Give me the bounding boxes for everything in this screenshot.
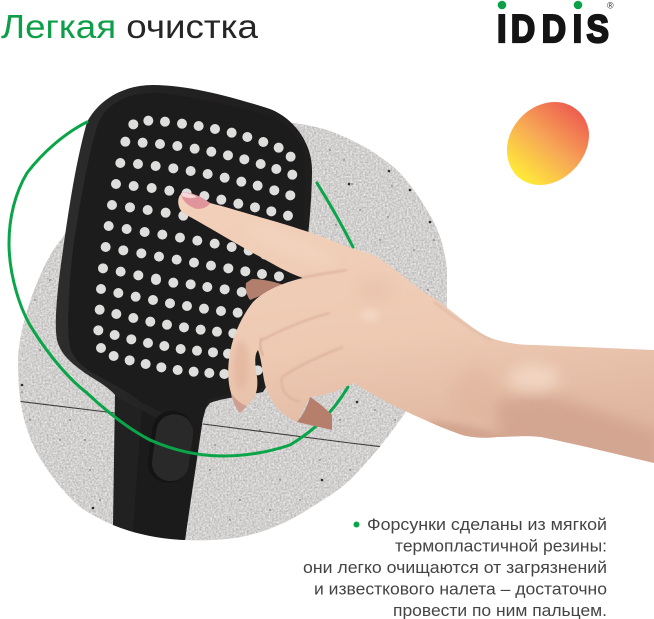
- green bullet: [354, 522, 360, 528]
- head rim: [56, 85, 312, 420]
- description text: они легко очищаются от загрязнений: [303, 559, 607, 577]
- logo: IDDIS: IDDIS: [497, 7, 609, 51]
- description text: [303, 516, 607, 619]
- description text: термопластичной резины:: [395, 538, 607, 556]
- hand and forearm silhouette: [178, 193, 654, 463]
- middle fingernail: [231, 393, 247, 413]
- shower head and handle: [56, 85, 312, 540]
- stone texture blob: [18, 123, 447, 540]
- thumb behind the fingers: [246, 279, 288, 300]
- mode button: [145, 408, 196, 485]
- spray nozzles: [98, 121, 292, 374]
- description text: и известкового налета – достаточно: [314, 580, 607, 598]
- gradient blob decoration: [507, 102, 589, 185]
- green ring outline: [9, 122, 353, 456]
- hand shading: [233, 269, 654, 463]
- title: Легкая очистка: [1, 9, 258, 46]
- curled finger tip: [297, 397, 332, 430]
- index fingernail: [181, 193, 210, 209]
- handle front face: [133, 403, 205, 540]
- logo: IDDIS: ®: [607, 0, 614, 10]
- handle: [113, 385, 205, 540]
- hand: [178, 193, 654, 480]
- description text: Форсунки сделаны из мягкой: [367, 516, 607, 534]
- head front face: [68, 93, 305, 430]
